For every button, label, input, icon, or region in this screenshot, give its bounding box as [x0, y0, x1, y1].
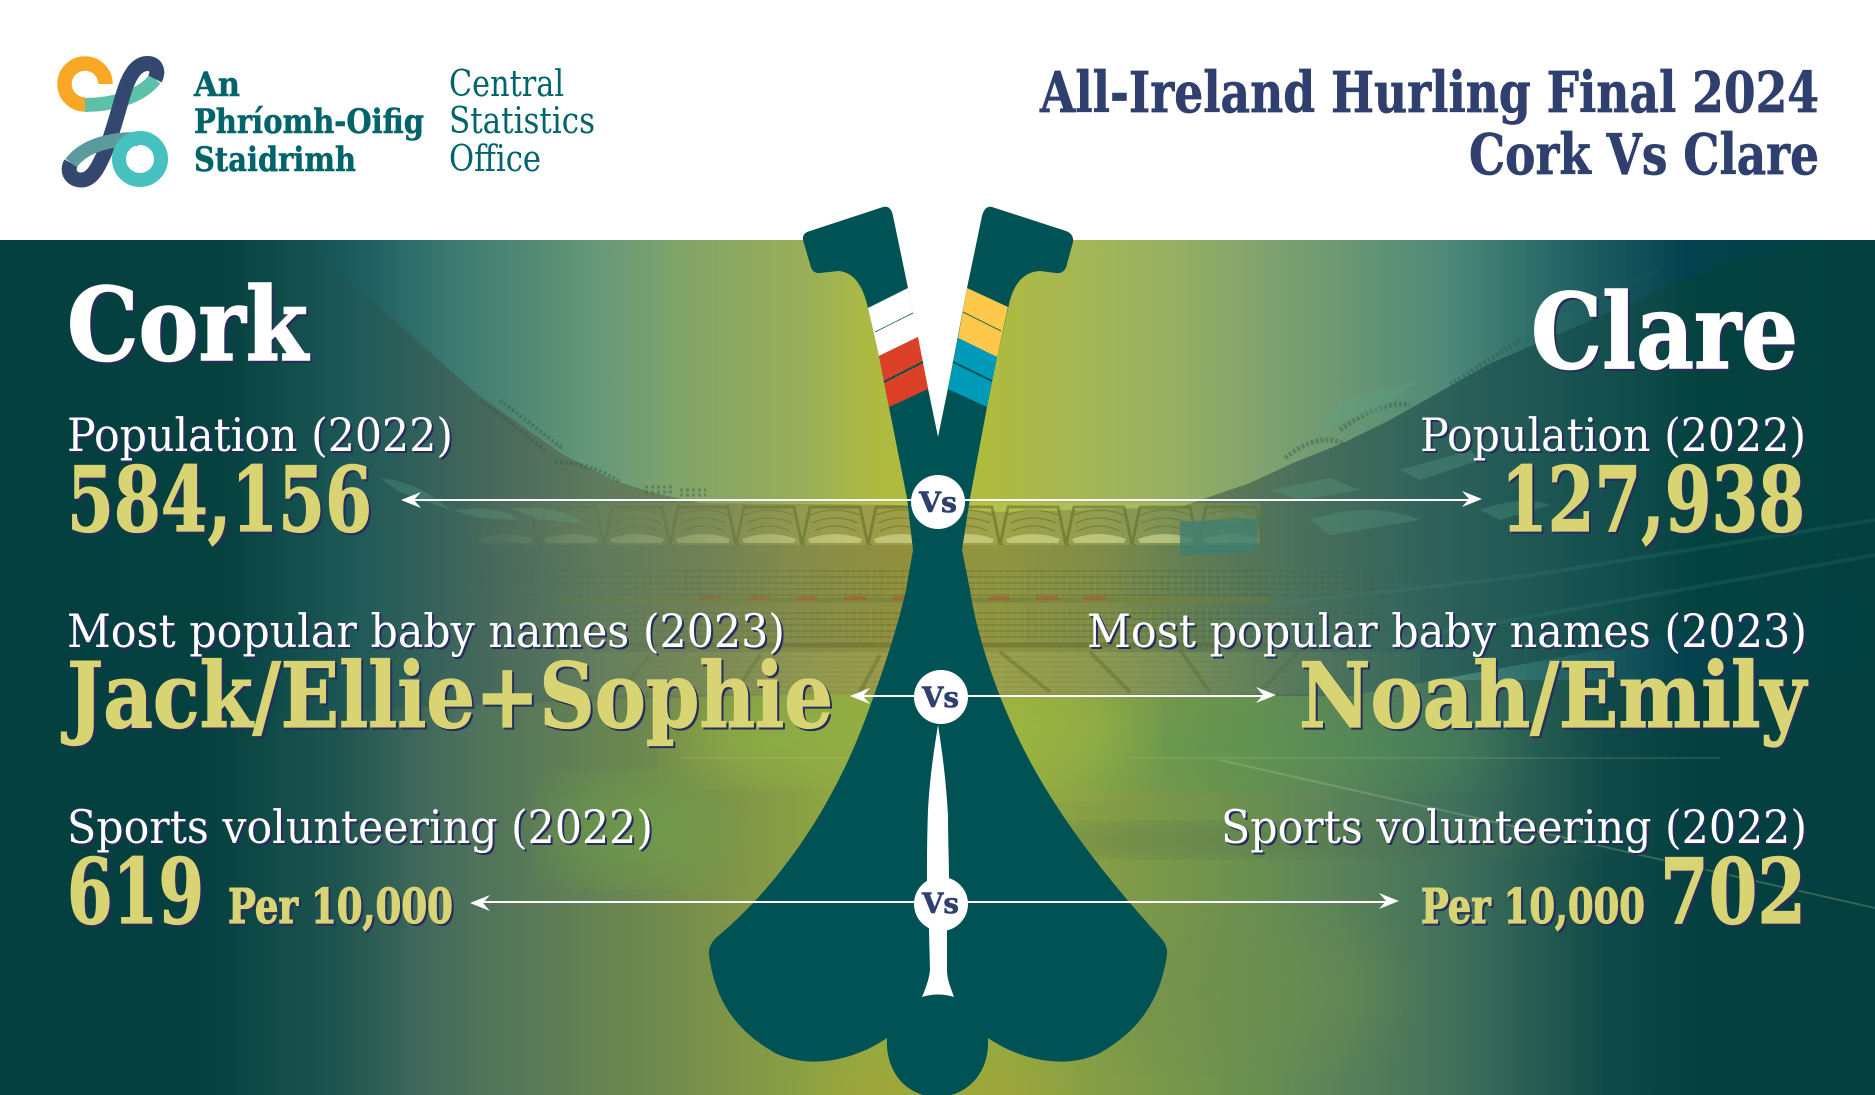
badge: Vs baby names	[914, 670, 968, 724]
sky	[300, 240, 1875, 680]
roof arches	[488, 503, 1362, 694]
Cork baby names label: Most popular baby names (2023)	[67, 604, 785, 658]
Cork volunteering label: Sports volunteering (2022)	[67, 800, 653, 854]
hurley centre slot	[922, 725, 954, 997]
Cork heading: Cork	[67, 265, 310, 384]
Cork volunteering value: 619	[67, 839, 204, 945]
badge: Vs baby names: Vs	[921, 681, 959, 714]
logo text: Irish	[193, 65, 424, 180]
gap between hurleys	[885, 200, 990, 437]
crossed hurley shape	[709, 207, 1167, 1095]
hurleys	[709, 200, 1167, 1095]
big screen	[1180, 518, 1257, 556]
badge: Vs population	[911, 475, 965, 529]
Cork baby names value: Jack/Ellie+Sophie	[61, 643, 833, 749]
Cork grip stripes	[868, 288, 928, 407]
arrow: volunteering	[470, 893, 1399, 911]
Cork panel	[61, 265, 833, 945]
badge: Vs volunteering: Vs	[921, 887, 959, 920]
logo text: English: Central	[449, 64, 564, 105]
Clare baby names value: Noah/Emily	[1299, 643, 1808, 749]
comparison arrows and Vs badges	[401, 475, 1482, 931]
Clare volunteering value: 702	[1660, 839, 1806, 945]
Cork population value: 584,156	[67, 447, 372, 553]
arrow: population	[401, 491, 1482, 508]
badge: Vs volunteering	[914, 877, 968, 931]
logo text: English	[449, 64, 595, 180]
Clare population label: Population (2022)	[1420, 408, 1806, 462]
roof panels	[380, 403, 1550, 535]
logo mark	[64, 63, 161, 180]
logo text: Irish: Staidrimh	[194, 140, 356, 180]
logo text: Irish: An	[193, 65, 240, 105]
pitch	[0, 670, 1875, 1095]
Clare baby names label: Most popular baby names (2023)	[1087, 604, 1807, 658]
stadium background	[0, 240, 1875, 1095]
logo text: English: Office	[449, 139, 541, 180]
Cork population label: Population (2022)	[67, 408, 453, 462]
arrow: baby names	[850, 687, 1276, 704]
Clare grip stripes	[948, 288, 1008, 407]
stand silhouette	[368, 252, 1780, 709]
logo text: Irish: Phríomh-Oifig	[194, 102, 424, 142]
Clare heading: Clare	[1531, 270, 1798, 393]
advertising strip on right stand	[1451, 518, 1875, 630]
header background	[0, 0, 1875, 240]
floodlights and roof detail	[480, 270, 1660, 495]
Cork volunteering unit: Per 10,000	[228, 879, 453, 935]
badge: Vs population: Vs	[918, 486, 957, 519]
Clare volunteering unit: Per 10,000	[1421, 879, 1645, 935]
logo text: English: Statistics	[449, 101, 595, 142]
Clare panel	[1087, 270, 1808, 945]
Clare volunteering label: Sports volunteering (2022)	[1221, 800, 1807, 854]
logo	[64, 63, 595, 180]
title	[1039, 60, 1819, 188]
